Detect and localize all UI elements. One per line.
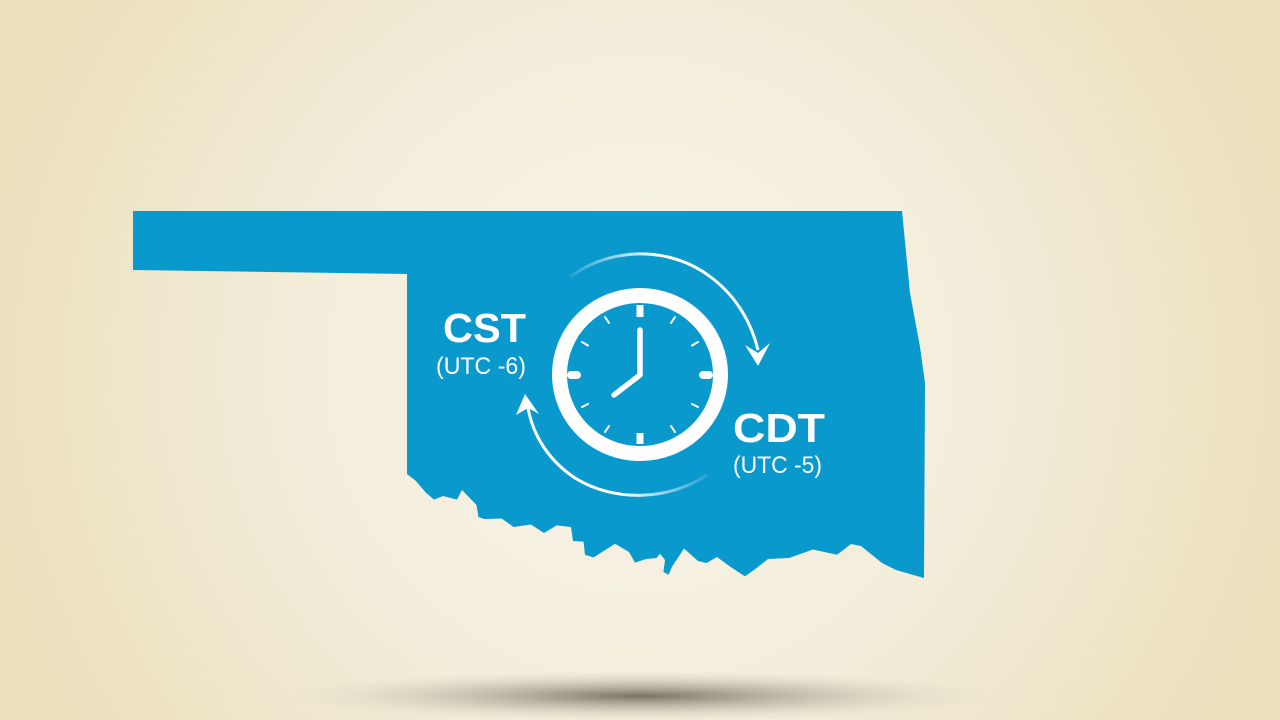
clock hands <box>614 330 640 395</box>
label: CST: CST <box>443 305 526 351</box>
label: UTC-6: (UTC -6) <box>436 353 526 380</box>
arrow: CST to CDT <box>570 254 770 366</box>
clock icon <box>560 296 720 454</box>
clock ring <box>560 296 720 454</box>
arrow: CDT to CST <box>516 394 707 495</box>
map: Oklahoma state silhouette <box>133 211 925 578</box>
ground shadow <box>290 671 990 720</box>
label: CDT: CDT <box>733 405 825 451</box>
clock hour marks <box>571 305 709 444</box>
label: UTC-5: (UTC -5) <box>733 452 822 479</box>
